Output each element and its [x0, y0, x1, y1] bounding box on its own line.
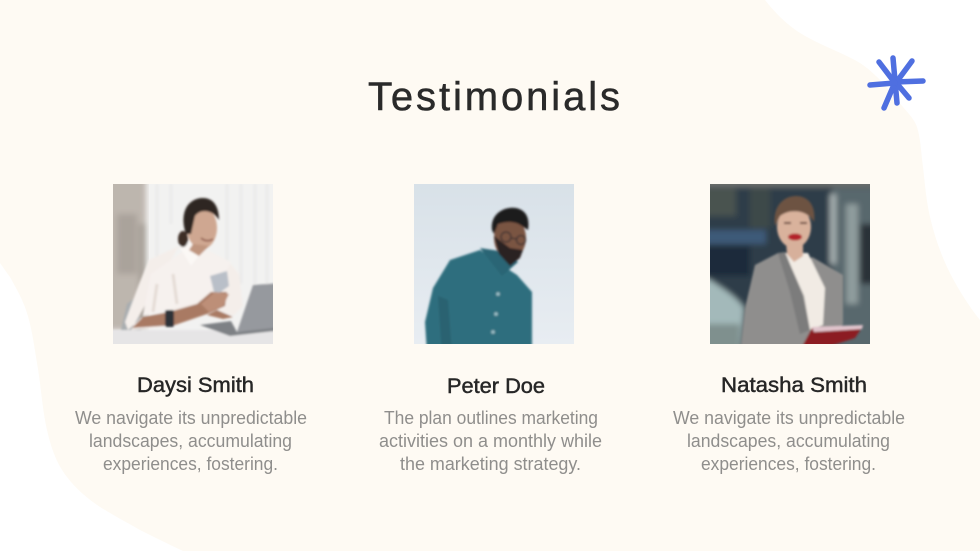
icon: blue asterisk	[870, 58, 923, 108]
description: We navigate its unpredictable	[75, 408, 307, 428]
photo: woman in grey blazer	[710, 184, 870, 344]
description: experiences, fostering.	[103, 454, 278, 474]
description	[75, 408, 307, 474]
photo: woman with phone and laptop	[113, 184, 273, 344]
description	[673, 408, 905, 474]
testimonial card: Peter Doe	[379, 184, 602, 474]
description: The plan outlines marketing	[384, 408, 598, 428]
description: experiences, fostering.	[701, 454, 876, 474]
testimonial card: Daysi Smith	[75, 164, 307, 474]
description: We navigate its unpredictable	[673, 408, 905, 428]
name: Peter Doe	[447, 375, 545, 398]
description: landscapes, accumulating	[89, 431, 292, 451]
description: the marketing strategy.	[400, 454, 581, 474]
name: Daysi Smith	[137, 374, 254, 397]
description: landscapes, accumulating	[687, 431, 890, 451]
photo: man in teal shirt	[414, 184, 574, 344]
title: Testimonials	[368, 75, 620, 119]
description	[379, 408, 602, 474]
testimonial card: Natasha Smith	[673, 164, 905, 474]
description: activities on a monthly while	[379, 431, 602, 451]
name: Natasha Smith	[721, 374, 867, 397]
